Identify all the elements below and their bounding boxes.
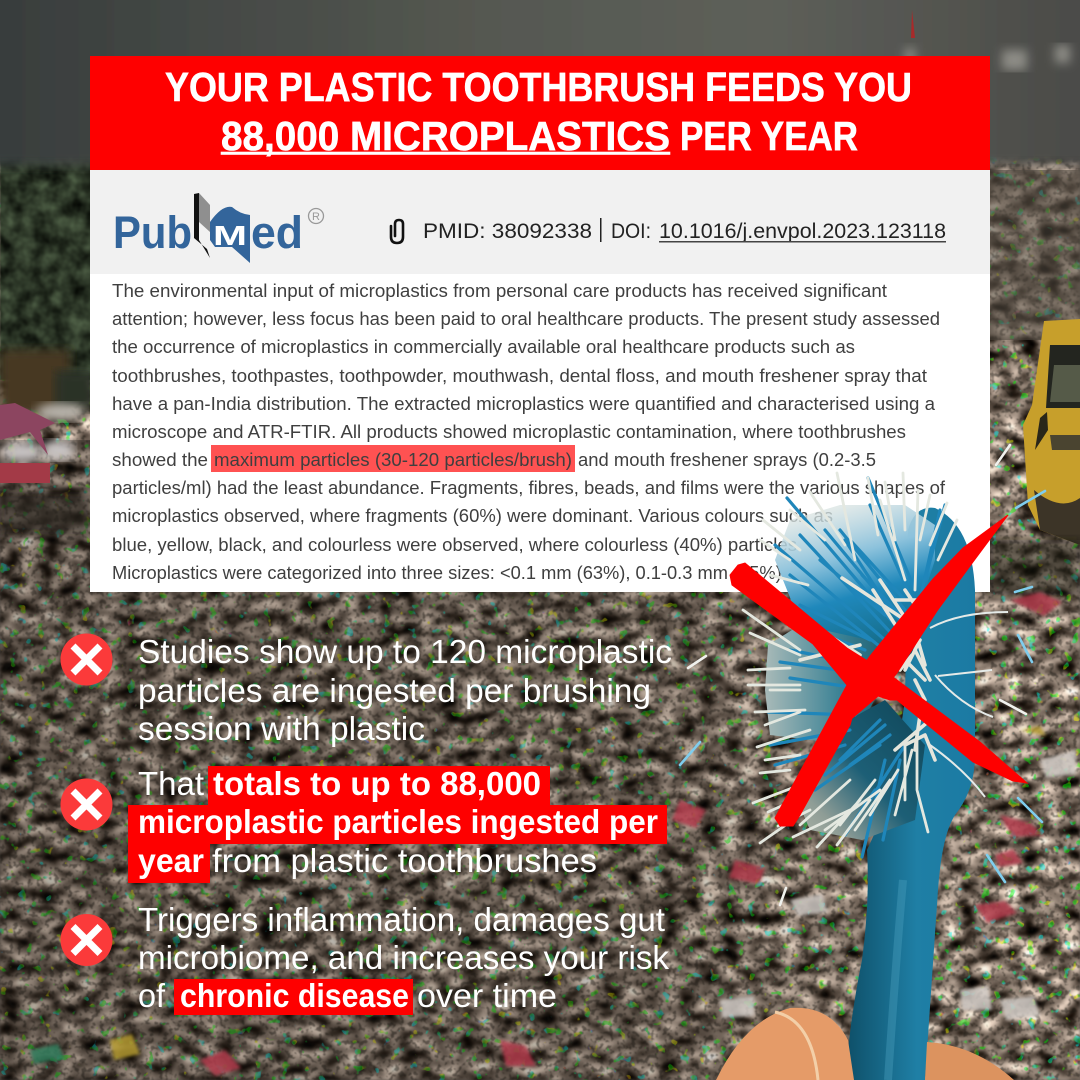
heading line 1: YOUR PLASTIC TOOTHBRUSH FEEDS YOU bbox=[165, 64, 912, 110]
bullet 3 text: chronic disease bbox=[180, 977, 409, 1014]
bullet 2 text: totals to up to 88,000 bbox=[213, 765, 541, 802]
abstract text bbox=[112, 281, 946, 583]
citation text bbox=[423, 218, 946, 243]
heading line 2: PER YEAR bbox=[680, 113, 858, 159]
icon: red x bbox=[60, 634, 112, 686]
bullet 2 text: That bbox=[138, 765, 204, 802]
abstract text: and mouth freshener sprays (0.2-3.5 bbox=[578, 450, 876, 470]
bullet 3 text: Triggers inflammation, damages gut bbox=[138, 901, 665, 938]
abstract text: showed the bbox=[112, 450, 208, 470]
excavator bbox=[1023, 319, 1080, 545]
abstract text: have a pan-India distribution. The extracted microplastics were quantified and characterised using a bbox=[112, 394, 936, 414]
blue bristles bbox=[768, 478, 945, 857]
bullet 1 text: session with plastic bbox=[138, 710, 425, 747]
litter shards bbox=[30, 592, 1076, 1076]
toothbrush handle bbox=[846, 508, 975, 1080]
loose fibres bbox=[930, 612, 1008, 797]
abstract text: maximum particles (30-120 particles/brush) bbox=[214, 450, 572, 470]
bullet 1 text bbox=[138, 633, 672, 747]
citation text: PMID: 38092338 bbox=[423, 220, 592, 243]
icon: PubMed logo bbox=[113, 193, 324, 263]
abstract text: particles/ml) had the least abundance. Fragments, fibres, beads, and films were the various shapes of bbox=[112, 478, 946, 498]
abstract text: The environmental input of microplastics from personal care products has received significant bbox=[112, 281, 887, 301]
icon: paperclip bbox=[391, 220, 403, 243]
icon: PubMed logo: M bbox=[213, 220, 247, 251]
bullet 3 text: microbiome, and increases your risk bbox=[138, 939, 669, 976]
bullet 3 text: over time bbox=[417, 977, 557, 1014]
panel: PubMed citation header bbox=[90, 170, 990, 274]
bullet 2 text: year bbox=[138, 842, 204, 879]
bullet 2 bbox=[60, 765, 667, 883]
icon: PubMed logo: ed bbox=[251, 207, 303, 258]
abstract text: Microplastics were categorized into three sizes: <0.1 mm (63%), 0.1-0.3 mm (35%)... bbox=[112, 563, 797, 583]
icon: PubMed logo: R bbox=[312, 211, 320, 223]
panel: title banner bbox=[90, 56, 990, 170]
icon: toothbrush held in fingers bbox=[680, 445, 1045, 1080]
abstract text: toothbrushes, toothpastes, toothpowder, mouthwash, dental floss, and mouth freshener spray that bbox=[112, 366, 927, 386]
citation text: DOI: bbox=[611, 220, 651, 243]
abstract text: microscope and ATR-FTIR. All products showed microplastic contamination, where toothbrushes bbox=[112, 422, 906, 442]
panel: study abstract bbox=[90, 274, 990, 592]
citation text: 10.1016/j.envpol.2023.123118 bbox=[659, 220, 946, 243]
icon: red x bbox=[60, 914, 112, 966]
bullet 3 text: of bbox=[138, 977, 166, 1014]
icon: red cross over toothbrush bbox=[730, 515, 1027, 826]
white bristles bbox=[743, 473, 957, 847]
heading line 2: 88,000 MICROPLASTICS bbox=[221, 113, 670, 159]
fingers bbox=[716, 1008, 854, 1080]
knotted white bristle roots bbox=[800, 578, 935, 760]
bullet 2 text bbox=[138, 765, 658, 879]
bullet 2 text: microplastic particles ingested per bbox=[138, 803, 658, 840]
bullet 1 bbox=[60, 633, 672, 747]
bristle masses bbox=[775, 505, 935, 660]
bullet 2 text: from plastic toothbrushes bbox=[212, 842, 597, 879]
bullet 1 text: Studies show up to 120 microplastic bbox=[138, 633, 672, 670]
bullet 3 bbox=[60, 901, 669, 1015]
icon: PubMed logo: Pub bbox=[113, 207, 192, 258]
icon: red x bbox=[60, 778, 112, 830]
bullet 1 text: particles are ingested per brushing bbox=[138, 672, 651, 709]
highlight: maximum particles bbox=[211, 445, 575, 472]
abstract text: the occurrence of microplastics in commercially available oral healthcare products such as bbox=[112, 337, 855, 357]
abstract text: microplastics observed, where fragments (60%) were dominant. Various colours such as bbox=[112, 506, 833, 526]
abstract text: attention; however, less focus has been paid to oral healthcare products. The present study assessed bbox=[112, 309, 940, 329]
bullet 3 highlight bbox=[174, 979, 413, 1015]
abstract text: blue, yellow, black, and colourless were observed, where colourless (40%) particles bbox=[112, 535, 797, 555]
bullet 3 text bbox=[138, 901, 669, 1014]
bullet 2 highlights bbox=[128, 766, 667, 883]
